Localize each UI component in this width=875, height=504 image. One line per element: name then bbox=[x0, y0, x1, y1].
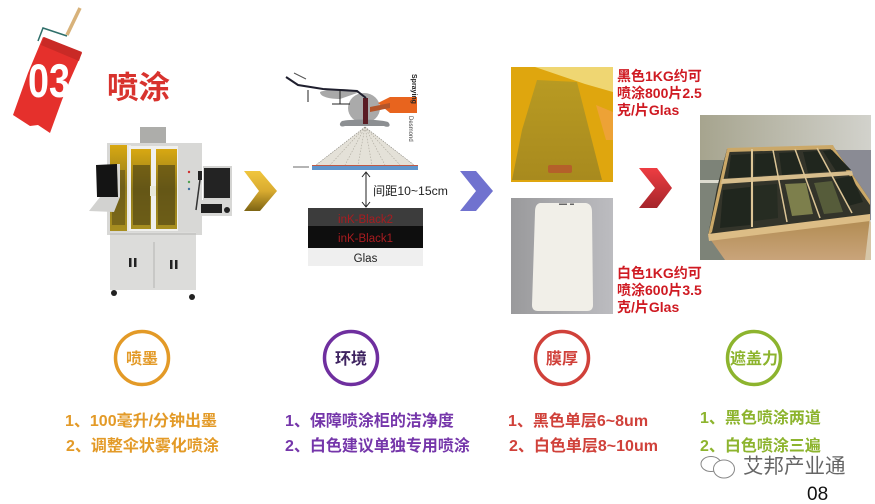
spray gun bbox=[286, 73, 417, 127]
title: 喷涂 bbox=[107, 69, 171, 105]
icon: red paint roller with number 03 bbox=[13, 8, 82, 133]
layer stack bbox=[308, 208, 423, 266]
circle: 膜厚 bbox=[536, 332, 588, 384]
text block: 环境 notes: 1、保障喷涂柜的洁净度 bbox=[285, 411, 454, 430]
layer stack: Glas bbox=[354, 253, 378, 265]
circle: 喷墨 bbox=[116, 332, 168, 384]
label: black ink yield: 喷涂800片2.5 bbox=[617, 85, 702, 101]
label: black ink yield bbox=[617, 68, 702, 118]
layer stack: inK-Black1 bbox=[338, 233, 393, 245]
circle: 环境: 环境 bbox=[335, 349, 367, 368]
text block: 遮盖力 notes bbox=[700, 408, 821, 455]
layer stack: inK-Black2 bbox=[338, 214, 393, 226]
watermark: 艾邦产业通 bbox=[743, 455, 846, 478]
arrow: spacing bbox=[362, 172, 370, 207]
label: black ink yield: 克/片Glas bbox=[617, 102, 679, 118]
spray cone bbox=[316, 127, 414, 165]
label: white ink yield: 喷涂600片3.5 bbox=[617, 282, 702, 298]
arrow: purple chevron bbox=[460, 171, 493, 211]
circle: 环境 bbox=[324, 332, 378, 384]
spray process diagram bbox=[286, 73, 448, 266]
substrate bbox=[312, 165, 418, 170]
label: white ink yield: 白色1KG约可 bbox=[617, 265, 702, 281]
text block: 膜厚 notes bbox=[508, 411, 658, 455]
circle: 遮盖力: 遮盖力 bbox=[730, 349, 778, 368]
arrow: yellow chevron bbox=[244, 171, 277, 211]
machine photo: spray cabinet bbox=[89, 127, 232, 300]
circle: 膜厚: 膜厚 bbox=[546, 350, 578, 368]
icon: WeChat logo bbox=[701, 456, 734, 478]
spacing label: 间距10~15cm bbox=[373, 184, 448, 198]
label: white ink yield bbox=[617, 265, 702, 315]
right monitor and keyboard bbox=[196, 166, 232, 216]
circle: 遮盖力 bbox=[728, 332, 780, 384]
text block: 遮盖力 notes: 2、白色喷涂三遍 bbox=[700, 436, 821, 455]
label: white ink yield: 克/片Glas bbox=[617, 299, 679, 315]
diagram labels: Spraying bbox=[410, 74, 417, 104]
text block: 遮盖力 notes: 1、黑色喷涂两道 bbox=[700, 408, 821, 427]
spray process diagram: Desmond bbox=[407, 116, 413, 142]
text block: 环境 notes bbox=[285, 411, 470, 455]
arrow: red chevron bbox=[639, 168, 672, 208]
back row panels bbox=[728, 150, 851, 178]
section number 03: 03 bbox=[28, 55, 70, 108]
text block: 喷墨 notes: 1、100毫升/分钟出墨 bbox=[65, 411, 217, 430]
photo: white coated glass bbox=[511, 198, 613, 314]
text block: 环境 notes: 2、白色建议单独专用喷涂 bbox=[285, 436, 470, 455]
text block: 喷墨 notes bbox=[65, 411, 219, 455]
front row panels bbox=[720, 176, 863, 228]
label: black ink yield: 黑色1KG约可 bbox=[617, 68, 702, 84]
left monitor and keyboard bbox=[89, 164, 120, 212]
text block: 膜厚 notes: 2、白色单层8~10um bbox=[509, 436, 658, 455]
text block: 喷墨 notes: 2、调整伞状雾化喷涂 bbox=[66, 436, 219, 455]
circle: 喷墨: 喷墨 bbox=[126, 350, 158, 368]
text block: 膜厚 notes: 1、黑色单层6~8um bbox=[508, 411, 648, 430]
photo: tray of coated glass bbox=[700, 115, 871, 260]
photo: black coated glass bbox=[511, 67, 613, 182]
